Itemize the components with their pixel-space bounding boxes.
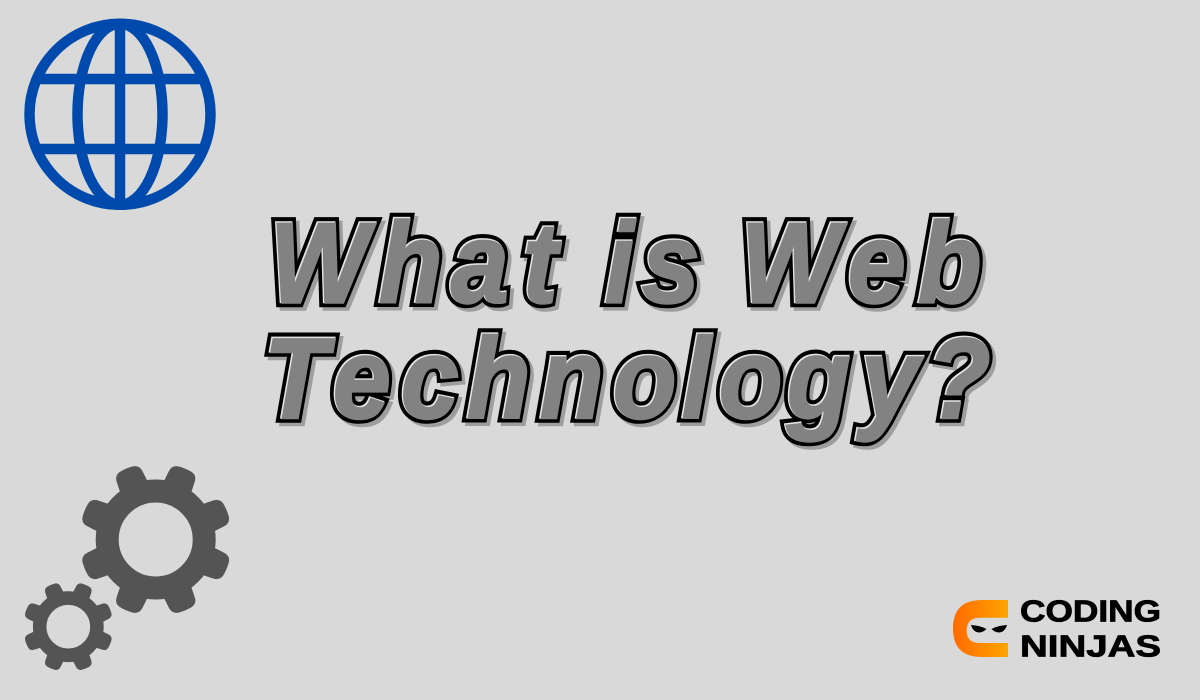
title highlight layer: What is Web — [269, 199, 981, 327]
icon: small gear — [23, 581, 114, 672]
title highlight layer: Technology? — [263, 314, 990, 442]
title black outline layer — [263, 199, 990, 442]
title shadow layer — [266, 202, 993, 446]
logo wordmark — [1020, 594, 1161, 664]
title black outline layer: Technology? — [263, 314, 990, 442]
logo wordmark: NINJAS — [1020, 628, 1161, 664]
logo: Coding Ninjas — [953, 594, 1161, 664]
logo mark: ninja eyes — [971, 625, 1007, 632]
title grey fill layer — [264, 200, 991, 443]
title shadow layer: What is Web — [272, 202, 984, 330]
title grey fill layer: What is Web — [270, 200, 982, 328]
title highlight layer — [263, 199, 990, 442]
title shadow layer: Technology? — [266, 318, 993, 446]
icon: globe — [30, 24, 210, 205]
title black outline layer: What is Web — [269, 199, 981, 327]
logo wordmark: CODING — [1020, 594, 1161, 628]
title: What is Web Technology? — [263, 199, 993, 446]
icon: large gear — [79, 463, 232, 616]
logo mark: orange C — [953, 600, 1008, 657]
title grey fill layer: Technology? — [264, 315, 991, 443]
